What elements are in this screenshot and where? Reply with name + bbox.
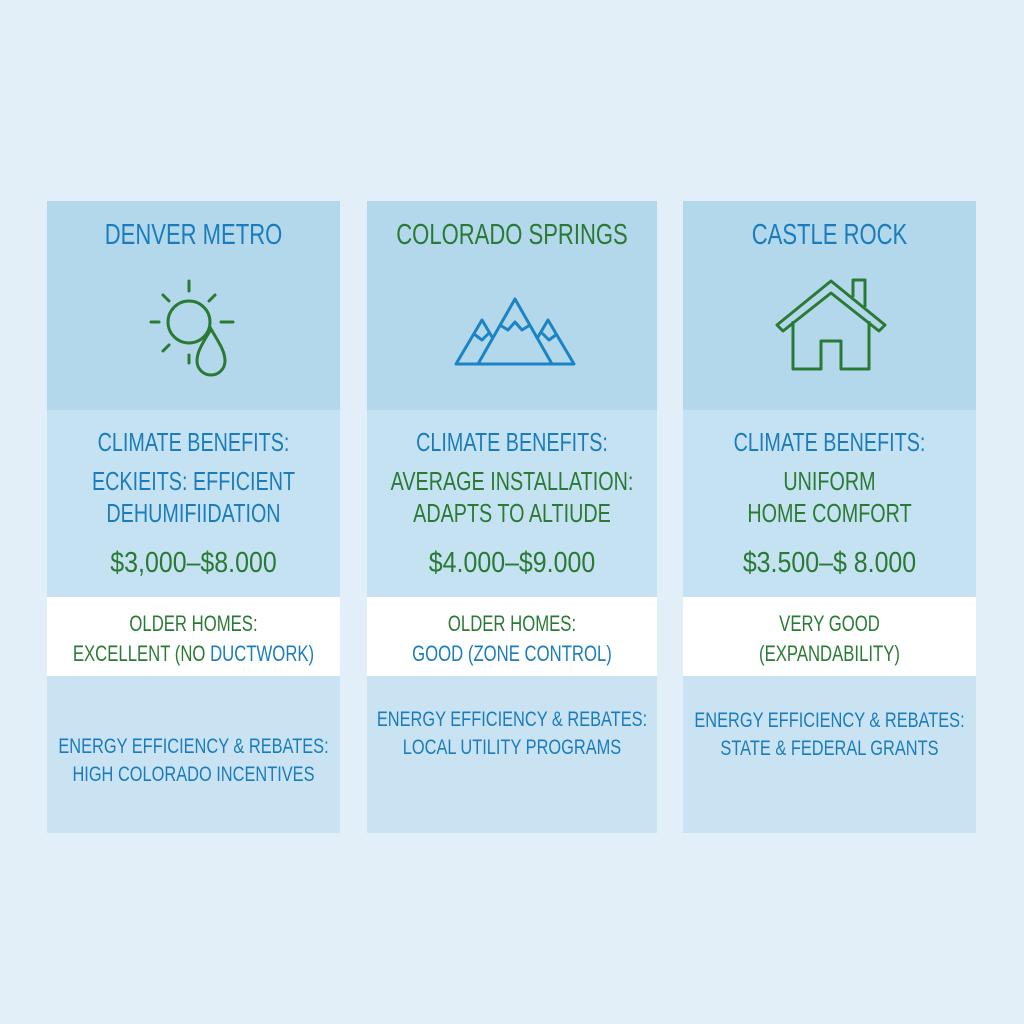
heading: DENVER METRO (105, 219, 282, 251)
text block: older homes: OLDER HOMES: (129, 611, 258, 636)
text block: climate benefits: CLIMATE BENEFITS: (98, 427, 289, 457)
text block: energy efficiency (58, 735, 329, 786)
heading: CASTLE ROCK (752, 219, 907, 251)
text block: climate benefits: $4.000–$9.000 (429, 547, 595, 579)
text block: energy efficiency: HIGH COLORADO INCENTIVES (72, 763, 315, 786)
text block: climate benefits (734, 427, 925, 579)
panel: Colorado Springs (367, 201, 657, 833)
icon: mountains (454, 297, 576, 366)
text block: older homes: GOOD (ZONE CONTROL) (412, 641, 612, 666)
text block: climate benefits: CLIMATE BENEFITS: (734, 427, 925, 457)
text block: energy efficiency: LOCAL UTILITY PROGRAMS (403, 736, 621, 759)
text block: energy efficiency: ENERGY EFFICIENCY & REBATES: (694, 709, 965, 732)
text block: climate benefits: AVERAGE INSTALLATION: (391, 466, 633, 496)
text block: rating (759, 611, 900, 666)
text block: energy efficiency: ENERGY EFFICIENCY & REBATES: (58, 735, 329, 758)
text block: rating: VERY GOOD (779, 611, 880, 636)
text block: energy efficiency: STATE & FEDERAL GRANTS (720, 737, 939, 760)
text block: climate benefits: ECKIEITS: EFFICIENT (92, 466, 295, 496)
icon: sun and water drop (150, 280, 234, 376)
text block: older homes: EXCELLENT (NO DUCTWORK) (73, 641, 314, 666)
text block: energy efficiency (377, 708, 647, 759)
heading: COLORADO SPRINGS (396, 219, 628, 251)
text block: climate benefits: UNIFORM (783, 466, 876, 496)
text block: climate benefits: $3,000–$8.000 (110, 547, 277, 579)
icon: house (775, 278, 887, 370)
text block: rating: (EXPANDABILITY) (759, 641, 900, 666)
text block: climate benefits (92, 427, 295, 579)
panel: Denver Metro (47, 201, 340, 833)
text block: climate benefits (390, 427, 633, 579)
text block: older homes (73, 611, 314, 666)
text block: climate benefits: ADAPTS TO ALTIUDE (413, 498, 611, 528)
text block: climate benefits: CLIMATE BENEFITS: (416, 427, 608, 457)
text block: climate benefits: DEHUMIFIIDATION (106, 498, 281, 528)
text block: climate benefits: HOME COMFORT (747, 498, 912, 528)
panel: Castle Rock (683, 201, 976, 833)
text block: climate benefits: $3.500–$ 8.000 (743, 547, 916, 579)
text block: energy efficiency (694, 709, 965, 760)
text block: energy efficiency: ENERGY EFFICIENCY & REBATES: (377, 708, 647, 731)
text block: older homes: OLDER HOMES: (448, 611, 576, 636)
text block: older homes (412, 611, 612, 666)
